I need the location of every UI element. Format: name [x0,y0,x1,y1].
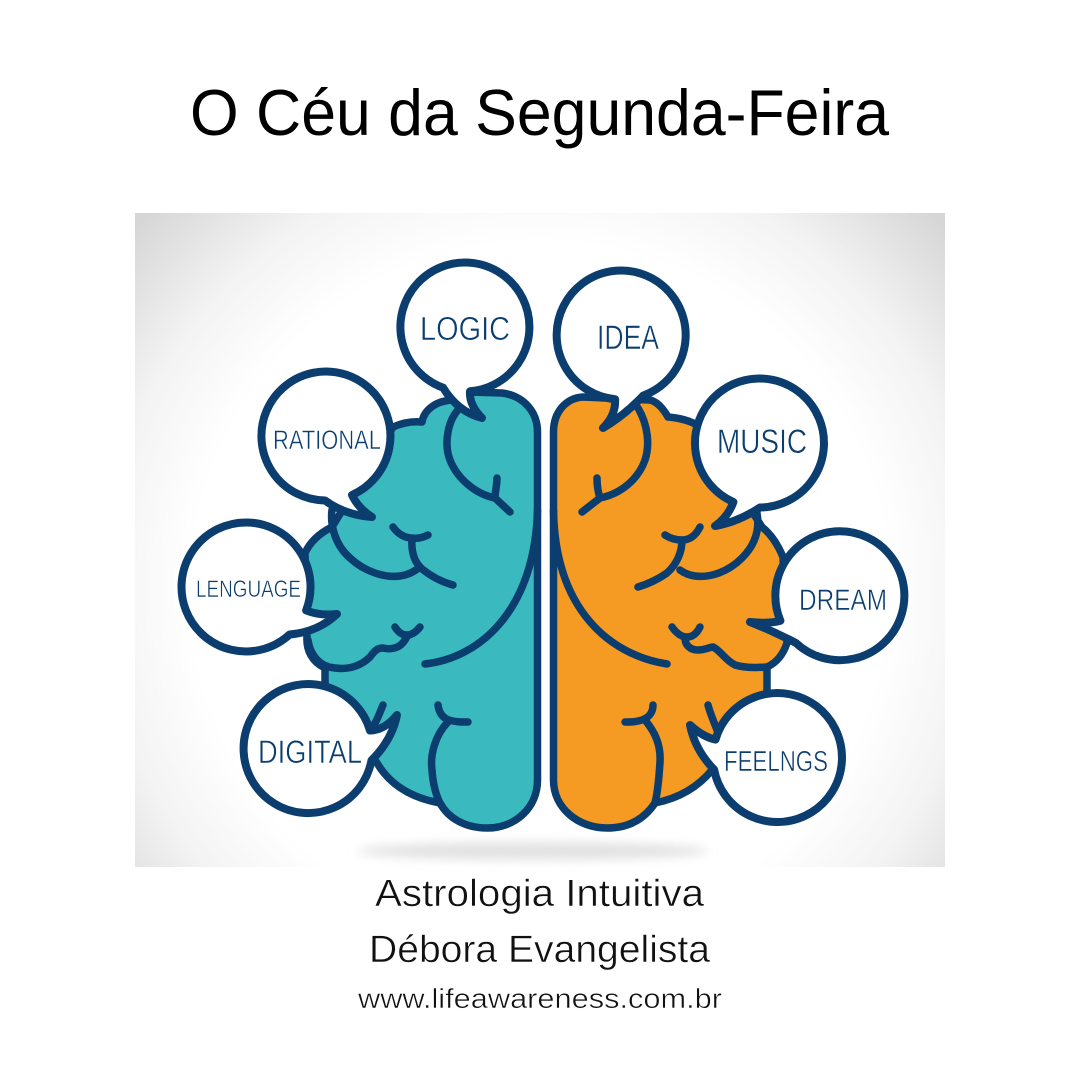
left brain hemisphere [305,392,538,828]
bubble: LENGUAGE [182,522,337,651]
bubble: IDEA: IDEA [597,319,659,357]
bubble: DREAM: DREAM [799,584,887,617]
panel background [135,213,945,867]
bubble: DIGITAL: DIGITAL [258,734,362,770]
bubble: DIGITAL [244,684,397,813]
bubble: LOGIC [400,263,529,418]
bubble: RATIONAL: RATIONAL [273,425,381,455]
subtitle: Astrologia Intuitiva: Astrologia Intuitiva [375,873,705,915]
bubble: RATIONAL [261,372,390,517]
subtitle: Débora Evangelista: Débora Evangelista [369,929,711,971]
website: www.lifeawareness.com.br [357,983,722,1014]
bubble: DREAM [750,531,904,660]
illustration panel: brain [135,213,945,867]
bubble: IDEA [557,270,686,428]
title: O Céu da Segunda-Feira [190,76,890,149]
brain shadow [358,842,708,860]
bubble: LENGUAGE: LENGUAGE [196,576,301,603]
bubble: FEELNGS [690,693,842,822]
bubble: FEELNGS: FEELNGS [724,746,828,778]
right brain hemisphere [554,397,787,828]
bubble: MUSIC: MUSIC [717,423,807,461]
bubble: MUSIC [695,379,824,526]
bubble: LOGIC: LOGIC [420,310,510,347]
